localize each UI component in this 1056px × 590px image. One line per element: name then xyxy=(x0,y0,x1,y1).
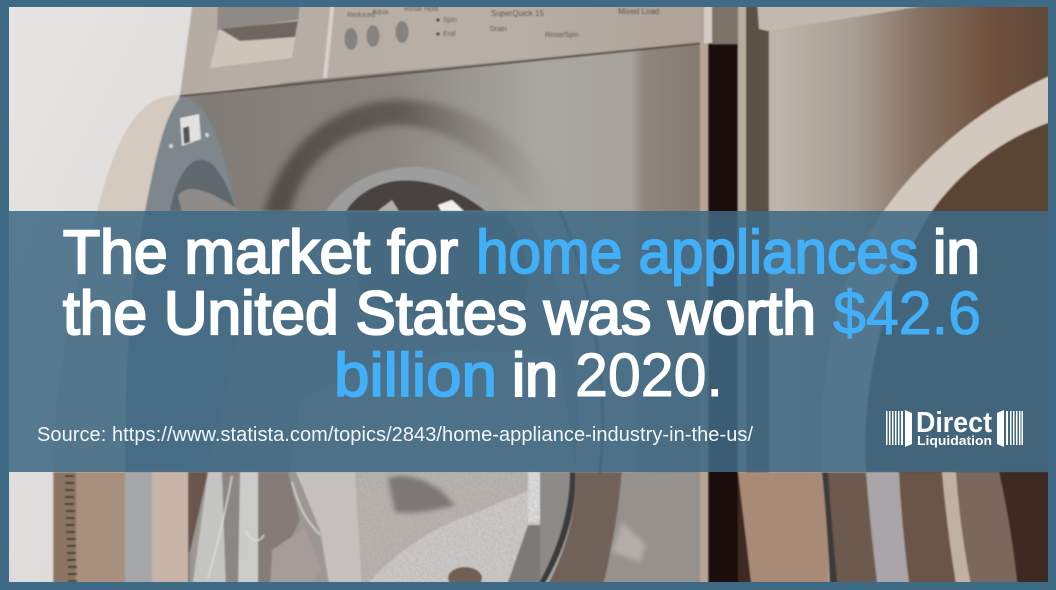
photo: washing machine and dryer: Rinse Hold xyxy=(404,6,438,13)
door glass through band xyxy=(260,210,486,213)
photo: washing machine and dryer: Mixed Load xyxy=(618,7,659,16)
dryer door ring xyxy=(821,73,1056,472)
washer door cream ring xyxy=(54,94,180,473)
logo left barcode xyxy=(886,410,912,447)
door dark arc xyxy=(261,96,522,211)
dryer top panel xyxy=(756,7,922,32)
panel divider xyxy=(323,0,335,78)
logo wordmark: Direct xyxy=(916,407,992,439)
photo: washing machine and dryer: Aqua xyxy=(372,9,388,16)
headline line 3: in xyxy=(512,341,558,409)
washer lower metal xyxy=(548,472,622,582)
grey door ring xyxy=(125,96,241,472)
headline line 3: 2020. xyxy=(575,341,723,409)
drum interior xyxy=(345,181,488,213)
glass streaks xyxy=(208,476,320,578)
source line: Source: https://www.statista.com/topics/2843/home-appliance-industry-in-the-us/ xyxy=(37,424,753,446)
photo: washing machine and dryer: End xyxy=(443,31,456,38)
headline line 1 xyxy=(63,218,980,286)
detergent drawer xyxy=(216,7,300,30)
wall xyxy=(0,0,280,590)
detergent panel xyxy=(180,7,705,96)
door inner metal ring xyxy=(326,166,474,211)
photo: washing machine and dryer: Reduced xyxy=(347,12,375,19)
washer body xyxy=(178,44,701,582)
door glass lower xyxy=(190,472,328,582)
headline line 1: The market for xyxy=(63,218,458,286)
photo: washing machine and dryer: Spin xyxy=(443,17,457,24)
seam between machines xyxy=(700,42,709,590)
logo: Direct Liquidation xyxy=(886,407,1023,448)
photo: washing machine and dryer: Rinse/Spin xyxy=(545,32,579,39)
translucent text band xyxy=(9,211,1048,472)
headline xyxy=(63,218,981,409)
washer door lower rim xyxy=(53,472,125,590)
headline line 2: $42.6 xyxy=(833,279,981,347)
headline line 3 xyxy=(334,341,723,409)
control buttons xyxy=(344,28,358,50)
ring label plate xyxy=(180,114,201,146)
photo: washing machine and dryer: SuperQuick 15 xyxy=(491,9,544,18)
photo: washing machine and dryer: Drain xyxy=(490,26,507,33)
dryer body xyxy=(769,0,1056,590)
rim ridges xyxy=(65,476,77,581)
dryer door interior xyxy=(865,120,1056,472)
headline line 1: in xyxy=(933,218,980,286)
logo: Direct Liquidation: Liquidation xyxy=(917,434,992,448)
logo right barcode xyxy=(997,410,1023,447)
towels xyxy=(355,472,540,590)
dryer lower bands xyxy=(738,472,828,590)
headline line 1: home appliances xyxy=(476,218,918,286)
ring inner opening xyxy=(170,160,236,211)
dark rim strip xyxy=(188,472,208,552)
headline line 3: billion xyxy=(334,341,497,409)
headline line 2: the United States was worth xyxy=(63,279,816,347)
